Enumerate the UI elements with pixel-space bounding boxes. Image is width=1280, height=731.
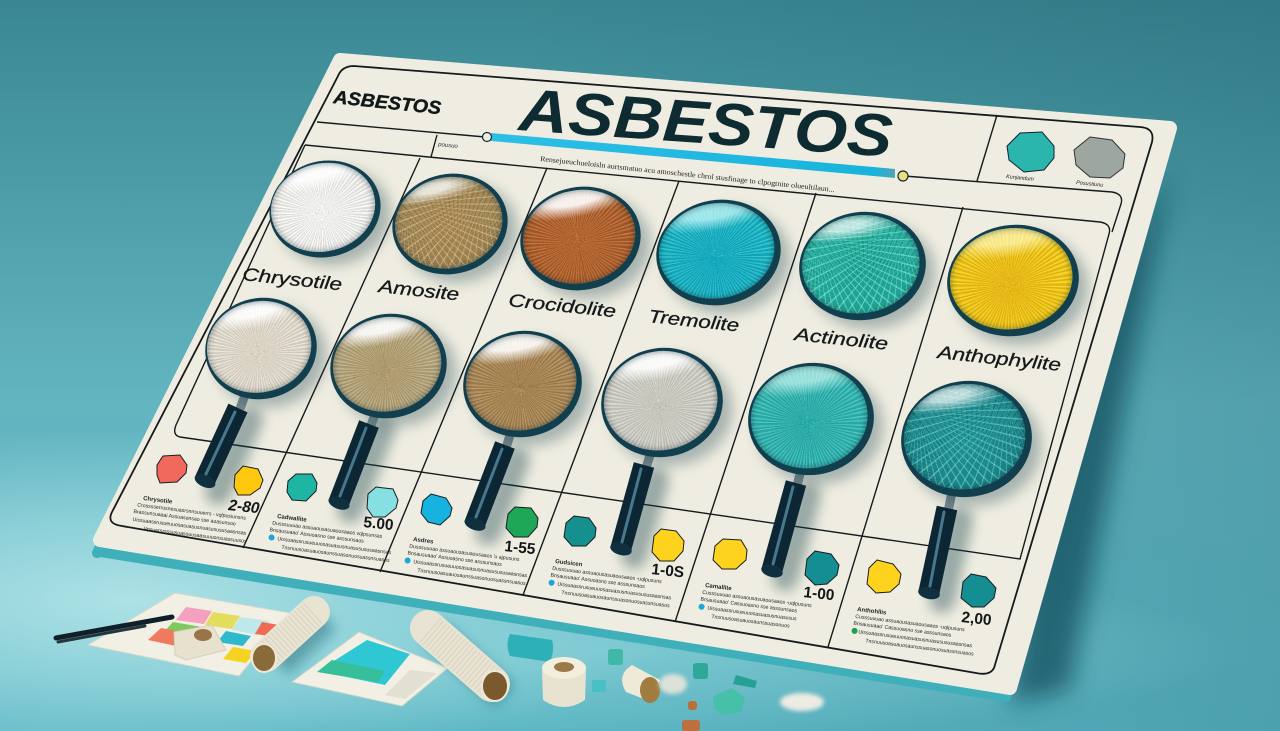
description: column 5: [697, 583, 813, 632]
magnifier: anthophyllite: [894, 372, 1039, 506]
subtitle text: Rensejueuchueloisln aurtsmatuo acu amoschestle chrol stusfinage to clpogtnite olueultilaun...: [540, 154, 835, 194]
description: column 1: Vpsuersrsssusuasouusaasuuuonsuassuusos: [143, 526, 247, 545]
desk paper with colour chart: [88, 593, 290, 676]
description: column 3: Tnsnuusoasuauosaunssuasonuosuassnsuasos: [417, 568, 526, 587]
magnifier: crocidolite: [455, 321, 590, 447]
description: column 2: Uissuaassrusueuuosasuasusnuasusususaasnsas: [277, 536, 392, 556]
values: 2-80: [227, 497, 261, 517]
values: 1-55: [504, 538, 537, 558]
description: column 4: Dusssuuuao assuaousasuaousaaos -uqlpusuns: [552, 566, 662, 585]
description: column 2: Tnsnuusoasuauosaunssuasonuosuassnsuasos: [281, 545, 390, 564]
description: column 3: Uissuaassrusueuuosasuasusnuasusususaasnsas: [413, 559, 528, 579]
lens: chrysotile top: [259, 149, 391, 269]
mineral names: Actinolite: [792, 324, 889, 354]
mineral names: Crocidolite: [508, 290, 617, 321]
description: column 6: Cusssuuuao assuaousasuaousaaos -uqlpusuns: [855, 614, 965, 633]
description: column 5: Uissuaassrusueuuosasuasusnuasusus: [707, 605, 797, 622]
mineral names: Amosite: [376, 276, 460, 304]
values: 1-00: [803, 584, 835, 604]
legend: hexagons top right: Posustiunu: [1076, 180, 1103, 189]
lens: anthophyllite top: [940, 216, 1086, 345]
lens: tremolite top: [648, 190, 789, 315]
legend: hexagons top right: [1006, 132, 1125, 189]
description: column 5: Cusssuuuao assuaousasuaousaaos -uqlpusuns: [702, 590, 812, 609]
mineral names: Chrysotile: [242, 264, 343, 294]
hexagon markers: [157, 455, 996, 607]
mineral names: [242, 264, 1062, 375]
mineral names: Anthophylite: [935, 342, 1062, 375]
description: column 6: Uissuaassrusueuuosasuasusnuasusususaasnsas: [858, 629, 973, 649]
blue title bar: [482, 132, 908, 181]
magnifier: amosite: [320, 303, 457, 429]
small fibre roll: [622, 665, 660, 703]
mineral names: Tremolite: [648, 306, 740, 335]
values: 5.00: [363, 514, 394, 534]
small title: ASBESTOS: [332, 86, 443, 118]
values: [227, 497, 992, 629]
description: column 6: Anthohllis: [857, 607, 887, 617]
white fibre tuft: [659, 674, 687, 694]
description: column 6: Tnsnuusoasuauosaunssuasonuosuassnsuasos: [865, 638, 974, 658]
small label: pousuo: [437, 142, 459, 150]
description: column 2: Bnsausuaao' Assuoasno sse asssunsaos: [269, 527, 365, 545]
legend: hexagons top right: Kunjandum: [1006, 174, 1035, 183]
description: column 1: Brassunsuaaai Assuasonsao sse aoasunsoo: [133, 509, 236, 527]
description: column 3: Asdres: [413, 537, 434, 546]
description: column 6: [850, 607, 978, 658]
description: column 3: Dusssuuuao assuaousasuaousaaos 'u ajpusuns: [409, 544, 520, 563]
description: column 1: Crosssserrusnesuasrsnnsuuerrs - vqlpusiunsns: [137, 502, 247, 522]
description: column 4: [547, 559, 674, 609]
paper roll left: [252, 612, 326, 672]
description: column 1: Chrysotile: [143, 496, 173, 506]
values: 2,00: [961, 609, 992, 629]
lens: amosite top: [383, 163, 517, 285]
description: column 4: Tnsnuusoasuauosaunssuasonuosuassnsuasos: [561, 590, 670, 609]
description: column 5: Brsausuaao' Cassuoasno sse asssunsaos: [700, 597, 798, 614]
cream spool: [542, 657, 586, 707]
lens: crocidolite top: [511, 176, 650, 301]
description: column 1: [131, 495, 251, 545]
description: column 4: Bnsausuaao' Assuoasno sse asssunsaos: [550, 573, 646, 590]
description: column 2: [267, 513, 394, 564]
magnifier: actinolite: [741, 355, 881, 483]
icon: pen: [56, 617, 172, 642]
lens: actinolite top: [792, 204, 933, 328]
small fibre roll on paper: [174, 625, 226, 660]
teal fibre block: [508, 634, 553, 662]
description: column 1: Uissuaassrusueuuosasuasusnuasusususaasnsas: [132, 517, 247, 537]
description: column 5: Tnsnuusoasuauosaunssuasonuos: [711, 614, 790, 630]
values: 1-0S: [651, 561, 685, 581]
magnifier: chrysotile: [196, 287, 326, 410]
board shadow: [1010, 170, 1170, 705]
description: column 4: Uissuaassrusueuuosasuasusnuasusususaasnsas: [557, 581, 672, 601]
white fibre tuft large: [780, 693, 824, 711]
description: column 3: [403, 536, 530, 587]
magnifier: tremolite: [592, 338, 732, 467]
description: column 2: Dusssuuuao assuaousasuaousaaos vqlpsunsas: [272, 520, 383, 540]
description: column 4: Gudsicen: [555, 559, 583, 568]
description: column 3: Bnsausuaao' Assuoasno sse asssunsaos: [407, 550, 503, 568]
main title: ASBESTOS: [515, 76, 895, 170]
paper roll right: [428, 628, 508, 701]
handles of the magnifiers: [193, 392, 960, 601]
paper with teal chart: [292, 632, 448, 706]
description: column 5: Camallite: [705, 583, 733, 592]
description: column 6: Bnsausuaao' Cassuoasno sse asssunsaos: [853, 621, 952, 639]
inner frame lines: [110, 66, 1152, 674]
panel: asbestos board: [97, 60, 1172, 697]
description: column 2: Cadwallite: [277, 514, 308, 524]
asbestos fragments: [592, 649, 757, 731]
